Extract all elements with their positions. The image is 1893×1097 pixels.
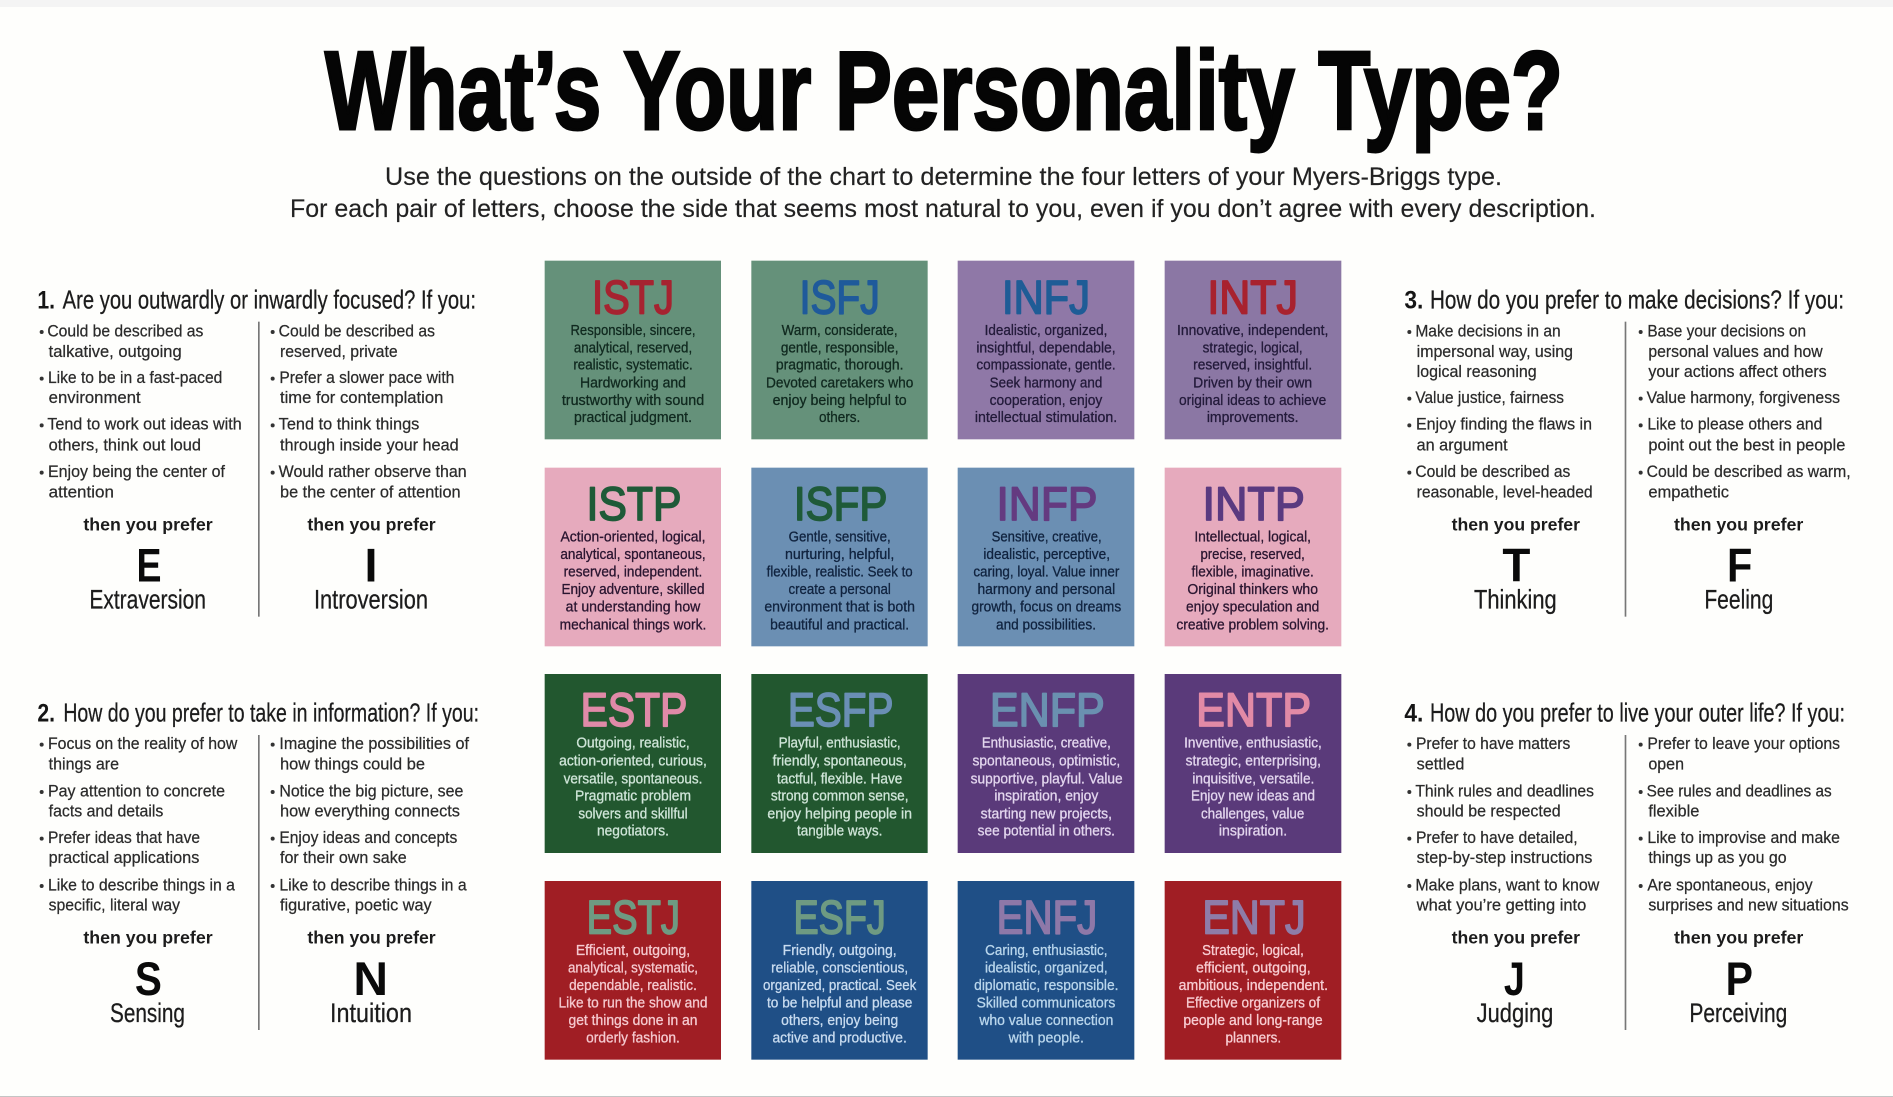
card: INTP: INTP xyxy=(1202,478,1305,531)
card: ISFP: flexible, realistic. Seek to xyxy=(767,565,913,581)
card: ISFP: environment that is both xyxy=(764,600,915,616)
heading: question 2: How do you prefer to take in information? If you: xyxy=(63,698,479,728)
bullet list: perceiving traits: open xyxy=(1648,756,1684,774)
bullet list: extraversion traits: attention xyxy=(49,483,114,501)
card: INTJ: INTJ xyxy=(1207,271,1298,324)
card: ESFJ: active and productive. xyxy=(772,1030,907,1046)
card: INFJ: intellectual stimulation. xyxy=(975,410,1117,426)
letter T: T xyxy=(1502,539,1531,592)
card: ISTJ: analytical, reserved, xyxy=(574,340,692,356)
card: ISTP: at understanding how xyxy=(566,600,701,616)
card: ESTJ: analytical, systematic, xyxy=(568,961,698,977)
card: ENTJ: efficient, outgoing, xyxy=(1196,961,1311,977)
heading: question 2: 2. xyxy=(37,700,55,728)
bullet list: perceiving traits: Prefer to leave your options xyxy=(1647,735,1840,753)
bullet list: sensing traits: specific, literal way xyxy=(49,896,181,914)
subtitle xyxy=(290,163,1596,223)
bullet list: thinking traits: Make decisions in an xyxy=(1415,322,1561,340)
card: INFP: harmony and personal xyxy=(977,582,1115,598)
card: ENTJ: ENTJ xyxy=(1202,891,1306,944)
bullet list: introversion traits: time for contemplation xyxy=(280,389,443,407)
bullet list: extraversion traits: talkative, outgoing xyxy=(49,343,182,361)
bullet list: sensing traits: Prefer ideas that have xyxy=(48,829,200,847)
label: Perceiving: Perceiving xyxy=(1689,998,1787,1028)
card: INTP: precise, reserved, xyxy=(1200,547,1305,563)
bullet list: extraversion traits: Could be described as xyxy=(47,322,203,340)
card: ENTJ xyxy=(1165,881,1341,1060)
bullet list: intuition traits: Imagine the possibilities of xyxy=(279,735,469,753)
card: ENFP: Enthusiastic, creative, xyxy=(982,736,1111,752)
card: ENFJ: ENFJ xyxy=(997,891,1097,944)
bullet list: thinking traits: Enjoy finding the flaws in xyxy=(1416,416,1592,434)
bullet list: perceiving traits xyxy=(1639,735,1849,914)
card: ISTP: reserved, independent. xyxy=(564,565,702,581)
card: ISTJ xyxy=(545,261,721,439)
bullet list: judging traits xyxy=(1407,735,1600,914)
card: ENFJ xyxy=(958,881,1134,1060)
bullet list: introversion traits: through inside your head xyxy=(280,437,459,455)
card: ESTJ: orderly fashion. xyxy=(586,1030,680,1046)
card: ISFJ: gentle, responsible, xyxy=(781,340,898,356)
bullet list: thinking traits: reasonable, level-headed xyxy=(1417,483,1593,501)
card: ENFP xyxy=(958,674,1134,853)
then you prefer label: then you prefer xyxy=(83,514,213,534)
bullet list: extraversion traits xyxy=(40,322,242,501)
card: ISFP: create a personal xyxy=(788,582,891,598)
card: ESFP: enjoy helping people in xyxy=(767,806,912,822)
card: ESFP: tactful, flexible. Have xyxy=(777,771,902,787)
card: INTP: Original thinkers who xyxy=(1187,582,1318,598)
card: INFP: and possibilities. xyxy=(996,617,1096,633)
card: ESFP: Playful, enthusiastic, xyxy=(779,736,901,752)
card: INTJ: improvements. xyxy=(1207,410,1298,426)
card: ENTP: inspiration. xyxy=(1219,824,1287,840)
card: ENFP: spontaneous, optimistic, xyxy=(972,754,1120,770)
bullet list: sensing traits: Like to describe things in a xyxy=(48,876,236,894)
card: ISTJ: Hardworking and xyxy=(580,375,686,391)
bullet list: perceiving traits: See rules and deadlines as xyxy=(1647,782,1832,800)
bullet list: introversion traits: reserved, private xyxy=(280,343,398,361)
bullet list: feeling traits: Could be described as warm, xyxy=(1647,463,1851,481)
card: ISTP: Enjoy adventure, skilled xyxy=(561,582,704,598)
card: INFJ: Idealistic, organized, xyxy=(985,323,1107,339)
label: Sensing: Sensing xyxy=(110,998,185,1028)
card: INFJ: compassionate, gentle. xyxy=(976,357,1116,373)
bullet list: intuition traits: Enjoy ideas and concepts xyxy=(279,829,457,847)
card: INTJ: Innovative, independent, xyxy=(1177,323,1328,339)
letter S: S xyxy=(135,952,162,1005)
card: ESFJ: reliable, conscientious, xyxy=(771,961,908,977)
card: ISFP: ISFP xyxy=(794,478,887,531)
bullet list: judging traits: should be respected xyxy=(1417,802,1561,820)
bullet list: judging traits: settled xyxy=(1417,756,1464,774)
card: ISFJ: pragmatic, thorough. xyxy=(776,357,903,373)
then you prefer label: then you prefer xyxy=(1674,514,1804,534)
panel: question 3 xyxy=(1404,284,1851,617)
bullet list: introversion traits: Prefer a slower pace with xyxy=(279,369,454,387)
bullet list: perceiving traits: flexible xyxy=(1648,802,1699,820)
label: Introversion: Introversion xyxy=(314,585,428,615)
card: ISTJ: ISTJ xyxy=(592,271,674,324)
card: INFJ: insightful, dependable, xyxy=(976,340,1116,356)
card: ESTP: versatile, spontaneous. xyxy=(564,771,702,787)
card: INTJ: original ideas to achieve xyxy=(1179,393,1326,409)
card: ESTP: solvers and skillful xyxy=(578,806,688,822)
panel: question 1 xyxy=(37,284,476,617)
column: sensing xyxy=(40,735,238,1028)
card: INTP: creative problem solving. xyxy=(1176,617,1329,633)
card: ENTJ: ambitious, independent. xyxy=(1179,978,1328,994)
heading: question 3: 3. xyxy=(1404,286,1423,314)
card: ESFJ: to be helpful and please xyxy=(767,996,912,1012)
letter J: J xyxy=(1504,952,1525,1005)
bullet list: perceiving traits: things up as you go xyxy=(1648,849,1787,867)
card: ENFP: ENFP xyxy=(990,684,1105,737)
column: perceiving xyxy=(1639,735,1849,1028)
card: ENFJ: Skilled communicators xyxy=(977,996,1115,1012)
bullet list: feeling traits: personal values and how xyxy=(1648,343,1823,361)
column: extraversion xyxy=(40,322,242,615)
card: ENTP: ENTP xyxy=(1196,684,1311,737)
card: ENFJ: Caring, enthusiastic, xyxy=(985,943,1107,959)
then you prefer label: then you prefer xyxy=(1452,514,1580,534)
card: ENTJ: people and long-range xyxy=(1183,1013,1323,1029)
card: ISTP: Action-oriented, logical, xyxy=(560,530,705,546)
label: Judging: Judging xyxy=(1477,998,1553,1028)
card: ESTJ: Efficient, outgoing, xyxy=(576,943,690,959)
bullet list: intuition traits: Notice the big picture, see xyxy=(279,782,463,800)
card: ENTP: Enjoy new ideas and xyxy=(1191,788,1315,804)
bullet list: perceiving traits: Like to improvise and make xyxy=(1647,829,1840,847)
then you prefer label: then you prefer xyxy=(307,514,436,534)
bullet list: judging traits: Prefer to have matters xyxy=(1416,735,1570,753)
card: INFP: growth, focus on dreams xyxy=(971,600,1121,616)
subtitle: Use the questions on the outside of the chart to determine the four letters of your Myers-Briggs type. xyxy=(385,163,1502,191)
card: ENFJ: diplomatic, responsible. xyxy=(974,978,1118,994)
card: INFP: Sensitive, creative, xyxy=(992,530,1102,546)
card: INTJ: reserved, insightful. xyxy=(1193,357,1312,373)
then you prefer label: then you prefer xyxy=(1674,928,1804,948)
bullet list: feeling traits: Like to please others and xyxy=(1647,416,1822,434)
bullet list: feeling traits: your actions affect others xyxy=(1648,363,1827,381)
bullet list: thinking traits: Value justice, fairness xyxy=(1415,389,1564,407)
card: INTP: flexible, imaginative. xyxy=(1191,565,1314,581)
card: ENTP xyxy=(1165,674,1341,853)
bullet list: judging traits: Think rules and deadlines xyxy=(1415,782,1594,800)
card: ENTP: inquisitive, versatile. xyxy=(1192,771,1314,787)
card: ISTJ: realistic, systematic. xyxy=(573,357,693,373)
column: intuition xyxy=(271,735,469,1028)
card: ISTP: ISTP xyxy=(586,478,681,531)
card: INFP: idealistic, perceptive, xyxy=(983,547,1110,563)
card: ESFP: ESFP xyxy=(788,684,893,737)
title: What’s Your Personality Type? xyxy=(325,29,1563,153)
card: ISTJ: practical judgment. xyxy=(574,410,692,426)
bullet list: feeling traits xyxy=(1639,322,1851,501)
card: ISFP xyxy=(751,468,928,646)
card: INTJ xyxy=(1165,261,1341,439)
bullet list: introversion traits: be the center of attention xyxy=(280,483,461,501)
card: ESTP: negotiators. xyxy=(597,824,669,840)
card: INFJ: cooperation, enjoy xyxy=(990,393,1103,409)
column: introversion xyxy=(271,322,467,615)
column: thinking xyxy=(1407,322,1593,615)
card: ESTJ xyxy=(545,881,721,1060)
bullet list: intuition traits: Like to describe things in a xyxy=(279,876,468,894)
panel: question 4 xyxy=(1404,698,1849,1030)
bullet list: thinking traits: logical reasoning xyxy=(1417,363,1537,381)
bullet list: feeling traits: Base your decisions on xyxy=(1647,322,1806,340)
bullet list: introversion traits: Tend to think things xyxy=(279,416,419,434)
card: ENTJ: planners. xyxy=(1225,1030,1281,1046)
card: ESFJ: organized, practical. Seek xyxy=(763,978,917,994)
bullet list: feeling traits: empathetic xyxy=(1648,483,1729,501)
then you prefer label: then you prefer xyxy=(83,928,213,948)
bullet list: sensing traits: things are xyxy=(49,756,119,774)
card: ENFJ: who value connection xyxy=(978,1013,1113,1029)
bullet list: thinking traits: an argument xyxy=(1417,437,1508,455)
card: ESFP: friendly, spontaneous, xyxy=(773,754,907,770)
card: ESTP: ESTP xyxy=(581,684,687,737)
card: INFP: INFP xyxy=(996,478,1097,531)
card: ENTP: strategic, enterprising, xyxy=(1186,754,1321,770)
letter F: F xyxy=(1727,539,1752,592)
card: ISFP: nurturing, helpful, xyxy=(785,547,894,563)
label: Intuition: Intuition xyxy=(330,998,412,1028)
card: ENTJ: Strategic, logical, xyxy=(1202,943,1304,959)
card: ESFP: strong common sense, xyxy=(771,788,908,804)
card: INTJ: Driven by their own xyxy=(1193,375,1312,391)
card: INTP xyxy=(1165,468,1341,646)
card: INFJ: INFJ xyxy=(1002,271,1090,324)
bullet list: intuition traits: figurative, poetic way xyxy=(280,896,432,914)
bullet list: feeling traits: point out the best in people xyxy=(1648,437,1845,455)
bullet list: judging traits: Prefer to have detailed, xyxy=(1416,829,1578,847)
column: feeling xyxy=(1639,322,1851,615)
card: INTJ: strategic, logical, xyxy=(1203,340,1303,356)
card: INFP xyxy=(958,468,1134,646)
bullet list: sensing traits: Focus on the reality of how xyxy=(48,735,238,753)
heading: question 1: Are you outwardly or inwardly focused? If you: xyxy=(63,284,476,314)
bullet list: intuition traits: how everything connects xyxy=(280,802,460,820)
card: ISFJ: enjoy being helpful to xyxy=(773,393,907,409)
card: ESTP xyxy=(545,674,721,853)
heading: question 4: 4. xyxy=(1404,700,1423,728)
label: Feeling: Feeling xyxy=(1704,585,1773,615)
card: ISFP: beautiful and practical. xyxy=(770,617,909,633)
card: ESFJ: others, enjoy being xyxy=(781,1013,898,1029)
then you prefer label: then you prefer xyxy=(307,928,436,948)
card: ISTP xyxy=(545,468,721,646)
letter I: I xyxy=(364,539,377,592)
card: ESFP: tangible ways. xyxy=(797,824,882,840)
card: ESTP: Outgoing, realistic, xyxy=(576,736,690,752)
bullet list: judging traits: Make plans, want to know xyxy=(1415,876,1600,894)
bullet list: extraversion traits: Tend to work out ideas with xyxy=(47,416,242,434)
bullet list: thinking traits xyxy=(1407,322,1593,501)
card: INTP: enjoy speculation and xyxy=(1186,600,1319,616)
label: Thinking: Thinking xyxy=(1474,585,1557,615)
card: ESFP xyxy=(751,674,928,853)
card: ENFP: starting new projects, xyxy=(981,806,1112,822)
card: ESTP: action-oriented, curious, xyxy=(559,754,707,770)
card: ESTJ: get things done in an xyxy=(568,1013,697,1029)
card: ESTP: Pragmatic problem xyxy=(575,788,691,804)
bullet list: intuition traits: for their own sake xyxy=(280,849,407,867)
bullet list: extraversion traits: others, think out loud xyxy=(49,437,201,455)
card: ENFP: inspiration, enjoy xyxy=(994,788,1099,804)
card: ISTP: analytical, spontaneous, xyxy=(560,547,706,563)
card: ISFP: Gentle, sensitive, xyxy=(789,530,891,546)
card: ISTP: mechanical things work. xyxy=(560,617,706,633)
bullet list: introversion traits: Would rather observe than xyxy=(279,463,467,481)
letter P: P xyxy=(1726,952,1753,1005)
bullet list: thinking traits: Could be described as xyxy=(1415,463,1570,481)
card: ENTJ: Effective organizers of xyxy=(1186,996,1321,1012)
card: ENTP: Inventive, enthusiastic, xyxy=(1184,736,1322,752)
card: ESFJ: ESFJ xyxy=(793,891,886,944)
letter N: N xyxy=(353,952,388,1005)
card: INTP: Intellectual, logical, xyxy=(1194,530,1311,546)
card: ENFJ: idealistic, organized, xyxy=(985,961,1108,977)
bullet list: sensing traits: Pay attention to concrete xyxy=(48,782,225,800)
card: ESTJ: ESTJ xyxy=(587,891,680,944)
card: ENTP: challenges, value xyxy=(1201,806,1304,822)
card: ENFP: supportive, playful. Value xyxy=(971,771,1123,787)
column: judging xyxy=(1407,735,1600,1028)
subtitle: For each pair of letters, choose the side that seems most natural to you, even if you don’t agree with every description. xyxy=(290,195,1596,223)
bullet list: judging traits: what you’re getting into xyxy=(1416,896,1586,914)
card: INFJ: Seek harmony and xyxy=(990,375,1102,391)
bullet list: extraversion traits: Like to be in a fast-paced xyxy=(48,369,222,387)
bullet list: judging traits: step-by-step instructions xyxy=(1417,849,1592,867)
card: ISFJ: ISFJ xyxy=(800,271,880,324)
label: Extraversion: Extraversion xyxy=(89,585,206,615)
bullet list: sensing traits xyxy=(40,735,238,914)
bullet list: sensing traits: facts and details xyxy=(49,802,163,820)
bullet list: thinking traits: impersonal way, using xyxy=(1417,343,1573,361)
card: ISTJ: Responsible, sincere, xyxy=(570,323,695,339)
bullet list: intuition traits: how things could be xyxy=(280,756,425,774)
bullet list: sensing traits: practical applications xyxy=(49,849,199,867)
bullet list: perceiving traits: Are spontaneous, enjoy xyxy=(1647,876,1813,894)
panel: question 2 xyxy=(37,698,479,1030)
bullet list: extraversion traits: environment xyxy=(49,389,141,407)
bullet list: extraversion traits: Enjoy being the center of xyxy=(48,463,225,481)
card: INFP: caring, loyal. Value inner xyxy=(973,565,1119,581)
card: INFJ xyxy=(958,261,1134,439)
card: ISFJ: others. xyxy=(819,410,860,426)
bullet list: feeling traits: Value harmony, forgiveness xyxy=(1647,389,1840,407)
card: ESFJ xyxy=(751,881,928,1060)
card: ISTJ: trustworthy with sound xyxy=(562,393,704,409)
card: ENFP: see potential in others. xyxy=(978,824,1115,840)
card: ESTJ: Like to run the show and xyxy=(558,996,707,1012)
card: ISFJ: Devoted caretakers who xyxy=(766,375,913,391)
card: ISFJ xyxy=(751,261,928,439)
bullet list: introversion traits: Could be described as xyxy=(279,322,435,340)
heading: question 1: 1. xyxy=(37,286,55,314)
then you prefer label: then you prefer xyxy=(1452,928,1580,948)
card: ESFJ: Friendly, outgoing, xyxy=(783,943,897,959)
bullet list: introversion traits xyxy=(271,322,467,501)
card: ESTJ: dependable, realistic. xyxy=(569,978,697,994)
card: ISFJ: Warm, considerate, xyxy=(782,323,898,339)
bullet list: intuition traits xyxy=(271,735,469,914)
card: ENFJ: with people. xyxy=(1008,1030,1084,1046)
bullet list: perceiving traits: surprises and new situations xyxy=(1648,896,1849,914)
letter E: E xyxy=(136,539,161,592)
